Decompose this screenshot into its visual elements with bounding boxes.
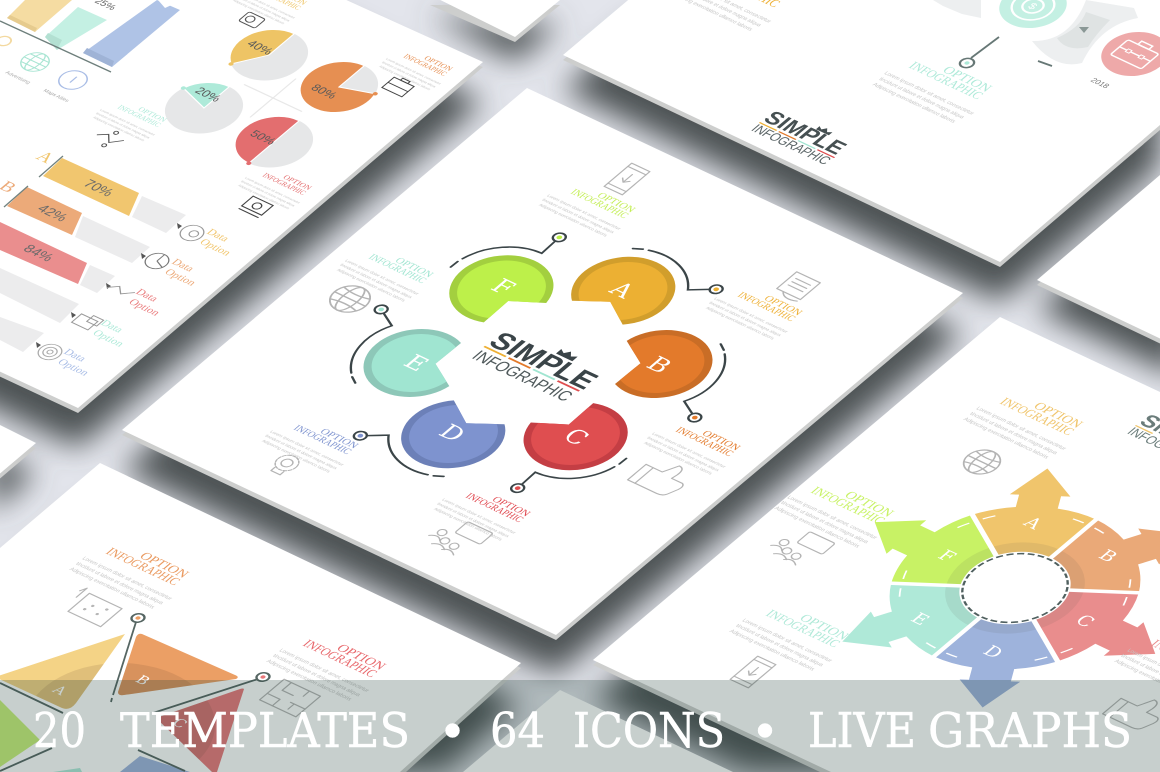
- label: top-left red: Adipiscing exercitation ullamco laboris: [237, 184, 291, 210]
- label: bottom-left orange: OPTION: [136, 550, 193, 580]
- caption: advertising: Advertising: [3, 70, 32, 85]
- segment F: [834, 488, 1055, 622]
- label: right yellow: [962, 383, 1095, 462]
- sheet: bottom-right: [593, 317, 1160, 772]
- bar axis A: [39, 156, 63, 177]
- label: right lime: Lorem ipsum dolor sit amet, consectetur: [785, 495, 878, 540]
- label: right red: [1113, 632, 1160, 704]
- sheet: bottom-centre: [463, 690, 733, 772]
- label: main A: Lorem ipsum dolor sit amet, consectetur: [713, 296, 790, 334]
- icon: right phone: [730, 656, 776, 688]
- data option labels: Data: [204, 227, 232, 244]
- triangle A: [0, 634, 125, 709]
- inner shade ring: [917, 525, 1113, 651]
- sheet: small left: [0, 420, 36, 482]
- label: main B: tincidunt ut labore et dolore magna aliqua: [646, 436, 721, 472]
- icon: pin: [0, 35, 14, 47]
- icon: location blue: [53, 67, 93, 93]
- label: top-right teal: INFOGRAPHIC: [906, 59, 987, 102]
- label: top-left orange: tincidunt ut labore et dolore magna aliqua: [381, 61, 437, 88]
- bar percentages: 70%: [80, 177, 118, 199]
- centre hole: [937, 538, 1093, 638]
- label: top-left yellow: [231, 0, 314, 27]
- grey arc left: [933, 0, 981, 18]
- label: main F: tincidunt ut labore et dolore magna aliqua: [541, 198, 616, 234]
- logo: top-right sheet: SIMPLE: [758, 107, 853, 158]
- panel: top-left bar chart: [0, 0, 180, 104]
- label: main B: [641, 414, 748, 477]
- triangle D: [120, 756, 190, 772]
- data option labels: Data: [98, 318, 126, 335]
- logo: right partial: [1123, 410, 1160, 471]
- triangle F: [0, 700, 40, 767]
- petal letters: A: [603, 277, 641, 303]
- icon: people speech: [423, 515, 493, 559]
- pie 80 percent: [284, 52, 395, 123]
- label: right yellow: Adipiscing exercitation ullamco laboris: [962, 417, 1050, 460]
- dashed ring: [941, 540, 1089, 636]
- label: bottom-left red: [265, 625, 398, 704]
- wheel letters: [906, 513, 1122, 662]
- segment A: [953, 466, 1109, 590]
- label: top-left red: INFOGRAPHIC: [260, 171, 308, 196]
- label: main E: tincidunt ut labore et dolore magna aliqua: [339, 263, 414, 299]
- label: main C: [431, 480, 538, 543]
- panel: pie charts: [148, 20, 395, 179]
- sheet: main: [122, 88, 963, 635]
- banner text: LIVE: [808, 703, 916, 759]
- label: top-left teal: INFOGRAPHIC: [115, 103, 163, 128]
- petal letters: B: [640, 352, 678, 378]
- pie percentages: [192, 38, 341, 147]
- label: main A: OPTION: [761, 294, 805, 318]
- logo: top-right sheet: INFOGRAPHIC: [747, 122, 834, 168]
- label: right yellow: Lorem ipsum dolor sit amet, consectetur: [974, 406, 1067, 451]
- label: main D: INFOGRAPHIC: [291, 424, 353, 456]
- bar A: [43, 158, 186, 233]
- label: bottom-left orange: tincidunt ut labore et dolore magna aliqua: [74, 562, 165, 606]
- label: top-left teal: Adipiscing exercitation ullamco laboris: [92, 116, 146, 142]
- petal A: [571, 248, 724, 325]
- label: main E: INFOGRAPHIC: [366, 253, 428, 285]
- pie 40 percent: [214, 20, 324, 90]
- petal C: [510, 403, 628, 494]
- banner text: 20: [33, 703, 86, 759]
- panel: top-right timeline: [933, 0, 1160, 90]
- bar C: [0, 222, 115, 293]
- bar percentages: 84%: [20, 242, 58, 264]
- grey arc shape: [1032, 0, 1138, 64]
- label: main F: Lorem ipsum dolor sit amet, consectetur: [546, 193, 623, 231]
- label: main E: Lorem ipsum dolor sit amet, consectetur: [344, 258, 421, 296]
- petal E: [350, 304, 461, 397]
- label: main D: Lorem ipsum dolor sit amet, consectetur: [269, 429, 346, 467]
- label: right lime: OPTION: [841, 489, 898, 519]
- sheet: far right: [1037, 175, 1160, 348]
- icon: blueprint: [60, 587, 125, 627]
- label: main D: tincidunt ut labore et dolore magna aliqua: [264, 434, 339, 470]
- label: top-left red: Lorem ipsum dolor sit amet, consectetur: [244, 176, 302, 205]
- label: main F: Adipiscing exercitation ullamco laboris: [538, 203, 609, 238]
- label: main C: INFOGRAPHIC: [463, 492, 525, 524]
- label: main F: OPTION: [594, 191, 638, 215]
- data option labels: Option: [197, 237, 234, 258]
- pie 50 percent: [217, 107, 329, 179]
- label: main C: tincidunt ut labore et dolore magna aliqua: [436, 502, 511, 538]
- letter B: B: [131, 673, 153, 688]
- cross divider: [221, 65, 325, 131]
- label: right yellow: OPTION: [1030, 400, 1087, 430]
- label: main C: Adipiscing exercitation ullamco laboris: [433, 507, 504, 542]
- icon: globe mint: [15, 49, 55, 75]
- data option labels: Data: [61, 347, 89, 364]
- label: bottom-left orange: INFOGRAPHIC: [103, 545, 184, 588]
- label: right teal: OPTION: [796, 612, 853, 642]
- icon: banknote: [239, 196, 273, 218]
- label: top-left orange: Adipiscing exercitation ullamco laboris: [378, 65, 432, 91]
- label: top-left orange: Lorem ipsum dolor sit amet, consectetur: [385, 57, 443, 86]
- label: bottom-left red: INFOGRAPHIC: [300, 637, 381, 680]
- label: right lime: INFOGRAPHIC: [808, 484, 889, 527]
- label: right teal: INFOGRAPHIC: [763, 607, 844, 650]
- label: main E: [334, 241, 441, 304]
- data option labels: Data: [133, 287, 161, 304]
- label: main C: Lorem ipsum dolor sit amet, consectetur: [441, 497, 518, 535]
- label: top-left red: tincidunt ut labore et dolore magna aliqua: [240, 180, 296, 207]
- label: bottom-left orange: Adipiscing exercitation ullamco laboris: [68, 567, 156, 610]
- icon: fingerprint: [33, 341, 67, 363]
- data option labels: Data: [169, 257, 197, 274]
- pin leader: [957, 37, 999, 69]
- label: bottom-left orange: Lorem ipsum dolor sit amet, consectetur: [80, 556, 173, 601]
- ticks: [857, 486, 1160, 690]
- label: right lime: Adipiscing exercitation ullamco laboris: [773, 506, 861, 549]
- label: main B: OPTION: [699, 429, 743, 453]
- triangle C: [156, 688, 244, 772]
- pie 20 percent: [148, 72, 259, 143]
- icon: maze: [260, 679, 320, 717]
- label: main D: [259, 412, 366, 475]
- panel: bottom-left triangles diagram: [0, 612, 272, 772]
- segment D: [921, 586, 1077, 710]
- icon: briefcase small: [382, 75, 416, 97]
- label: main B: Lorem ipsum dolor sit amet, consectetur: [651, 431, 728, 469]
- icon: nodes: [107, 282, 135, 298]
- grey arc inner: [1057, 12, 1110, 48]
- logo: centre: SIMPLE: [482, 327, 604, 395]
- label: right teal: Adipiscing exercitation ullamco laboris: [728, 629, 816, 672]
- label: main E: Adipiscing exercitation ullamco laboris: [336, 268, 407, 303]
- label: top-right teal: Adipiscing exercitation ullamco laboris: [871, 82, 956, 124]
- data option labels: Option: [55, 357, 92, 378]
- label: top-left teal: [91, 94, 174, 144]
- wheel letters: B: [1094, 547, 1122, 566]
- icon: folder: [72, 311, 104, 331]
- label: bottom-left red: Lorem ipsum dolor sit amet, consectetur: [277, 648, 370, 693]
- sheet: top-left: [0, 0, 483, 408]
- sheet: top-right: [563, 0, 1160, 262]
- bar E: [0, 317, 44, 352]
- banner text: ICONS: [573, 703, 725, 759]
- label: right yellow: INFOGRAPHIC: [997, 395, 1078, 438]
- label: top-right teal: Lorem ipsum dolor sit amet, consectetur: [882, 71, 975, 116]
- top bars axis: [0, 21, 111, 72]
- label: top-left red: [236, 162, 319, 212]
- leader A-B: [111, 612, 147, 702]
- bar markers: [36, 223, 182, 348]
- label: bottom-left red: OPTION: [333, 642, 390, 672]
- label: right teal: Lorem ipsum dolor sit amet, consectetur: [740, 618, 833, 663]
- label: main A: tincidunt ut labore et dolore magna aliqua: [708, 301, 783, 337]
- wheel letters: E: [906, 610, 934, 629]
- bar percentages: [20, 177, 118, 264]
- triangle E: [53, 768, 82, 772]
- icon: thumbs up: [628, 455, 697, 499]
- data option labels: Option: [90, 328, 127, 349]
- year: 2018: [1088, 76, 1112, 90]
- segment E: [821, 551, 1036, 678]
- bar percentages: 42%: [34, 202, 72, 224]
- label: top-right teal: OPTION: [939, 64, 996, 94]
- label: top-left teal: OPTION: [136, 106, 169, 124]
- circle: teal with dollar icon: [985, 0, 1081, 36]
- label: main E: OPTION: [392, 256, 436, 280]
- petal letters: D: [433, 420, 471, 446]
- label: bottom-left orange: [68, 533, 201, 612]
- bar B: [7, 187, 150, 263]
- panel: horizontal bars: [0, 148, 234, 378]
- petal letters: E: [397, 350, 435, 376]
- circle: pink with briefcase icon: [1087, 24, 1160, 84]
- icon: chart arrows: [90, 126, 128, 151]
- panel: centre flower diagram: [343, 226, 733, 499]
- banner: [0, 680, 1160, 772]
- petal letters: [397, 274, 678, 450]
- banner text: [33, 703, 1132, 759]
- data option labels: [55, 227, 234, 378]
- icon: pie outline: [140, 250, 174, 272]
- label: main A: INFOGRAPHIC: [735, 291, 797, 323]
- bar D: [0, 268, 79, 323]
- bar letter A: A: [32, 148, 59, 166]
- inner shade: [36, 663, 215, 759]
- label: main A: Adipiscing exercitation ullamco laboris: [705, 306, 776, 341]
- label: main F: [536, 176, 643, 239]
- banner text: 64: [490, 703, 545, 759]
- petal F: [449, 232, 567, 322]
- circle: teal with dollar icon: $: [1025, 1, 1040, 12]
- icon: right people: [765, 525, 835, 569]
- icon: right thumb: [1103, 689, 1160, 733]
- panel: arrow wheel diagram: [752, 418, 1160, 758]
- wheel letters: C: [1070, 612, 1099, 631]
- icon: right globe: [956, 445, 1008, 479]
- marker triangle: [1079, 27, 1089, 33]
- label: bottom-left red: Adipiscing exercitation ullamco laboris: [265, 659, 353, 702]
- petal D: [352, 400, 506, 478]
- icon: phone download: [604, 163, 650, 195]
- data option labels: Option: [126, 297, 163, 318]
- leader C: [153, 671, 272, 713]
- data option labels: Option: [162, 267, 199, 288]
- label: bottom-left red: tincidunt ut labore et dolore magna aliqua: [271, 654, 362, 698]
- label: top-left teal: tincidunt ut labore et dolore magna aliqua: [95, 112, 151, 139]
- label: top-left orange: [377, 43, 460, 93]
- banner text: TEMPLATES: [120, 703, 410, 759]
- icon: document hand: [773, 272, 820, 303]
- letter A: A: [48, 683, 71, 698]
- label: top-right teal: tincidunt ut labore et dolore magna aliqua: [877, 77, 966, 120]
- label: top-left red: OPTION: [281, 174, 314, 192]
- label: main F: INFOGRAPHIC: [568, 188, 630, 220]
- pie percentages: 50%: [247, 128, 280, 147]
- label: right yellow: tincidunt ut labore et dolore magna aliqua: [968, 412, 1059, 456]
- label: main B: INFOGRAPHIC: [673, 426, 735, 458]
- label: main D: OPTION: [317, 427, 361, 451]
- triangle B: [118, 634, 238, 695]
- top bars: [7, 0, 180, 67]
- label: right teal: [728, 595, 861, 674]
- bar axis B: [4, 186, 28, 207]
- segment B: [994, 498, 1160, 625]
- label: top-left orange: OPTION: [422, 55, 455, 73]
- label: main B: Adipiscing exercitation ullamco laboris: [643, 441, 714, 476]
- banner text: GRAPHS: [928, 703, 1132, 759]
- wheel letters: D: [978, 642, 1007, 662]
- sheet: bottom-left: [0, 463, 521, 772]
- label: main A: [703, 279, 810, 342]
- label: right teal: tincidunt ut labore et dolore magna aliqua: [734, 624, 825, 668]
- icon: camera: [239, 12, 265, 28]
- petal B: [615, 330, 726, 423]
- logo: centre: INFOGRAPHIC: [468, 347, 577, 404]
- pie percentages: 40%: [244, 38, 277, 57]
- label: main D: Adipiscing exercitation ullamco laboris: [261, 439, 332, 474]
- wheel letters: F: [933, 547, 960, 566]
- letter C: C: [168, 716, 190, 731]
- label: right lime: [773, 472, 906, 551]
- icon: head: [175, 222, 209, 244]
- segment gaps: [822, 461, 1160, 715]
- pie percentages: 20%: [192, 85, 225, 104]
- dash: [1038, 61, 1052, 66]
- label: top-left teal: Lorem ipsum dolor sit amet, consectetur: [99, 108, 157, 137]
- label: top-left orange: INFOGRAPHIC: [401, 52, 449, 77]
- petal letters: C: [557, 424, 595, 450]
- label: right lime: tincidunt ut labore et dolore magna aliqua: [779, 501, 870, 545]
- icon: gear bulb: [266, 452, 304, 477]
- caption: maps allies: Maps Allies: [41, 88, 70, 104]
- wheel letters: A: [1018, 513, 1047, 533]
- segment C: [975, 554, 1160, 688]
- label: main C: OPTION: [489, 495, 533, 519]
- divider lines: [0, 683, 185, 771]
- label: top-right teal: [870, 47, 1004, 127]
- petal letters: F: [485, 274, 521, 300]
- pie percentages: 80%: [308, 82, 341, 101]
- icon: globe: [322, 281, 378, 317]
- sheet: top-middle: [400, 0, 560, 37]
